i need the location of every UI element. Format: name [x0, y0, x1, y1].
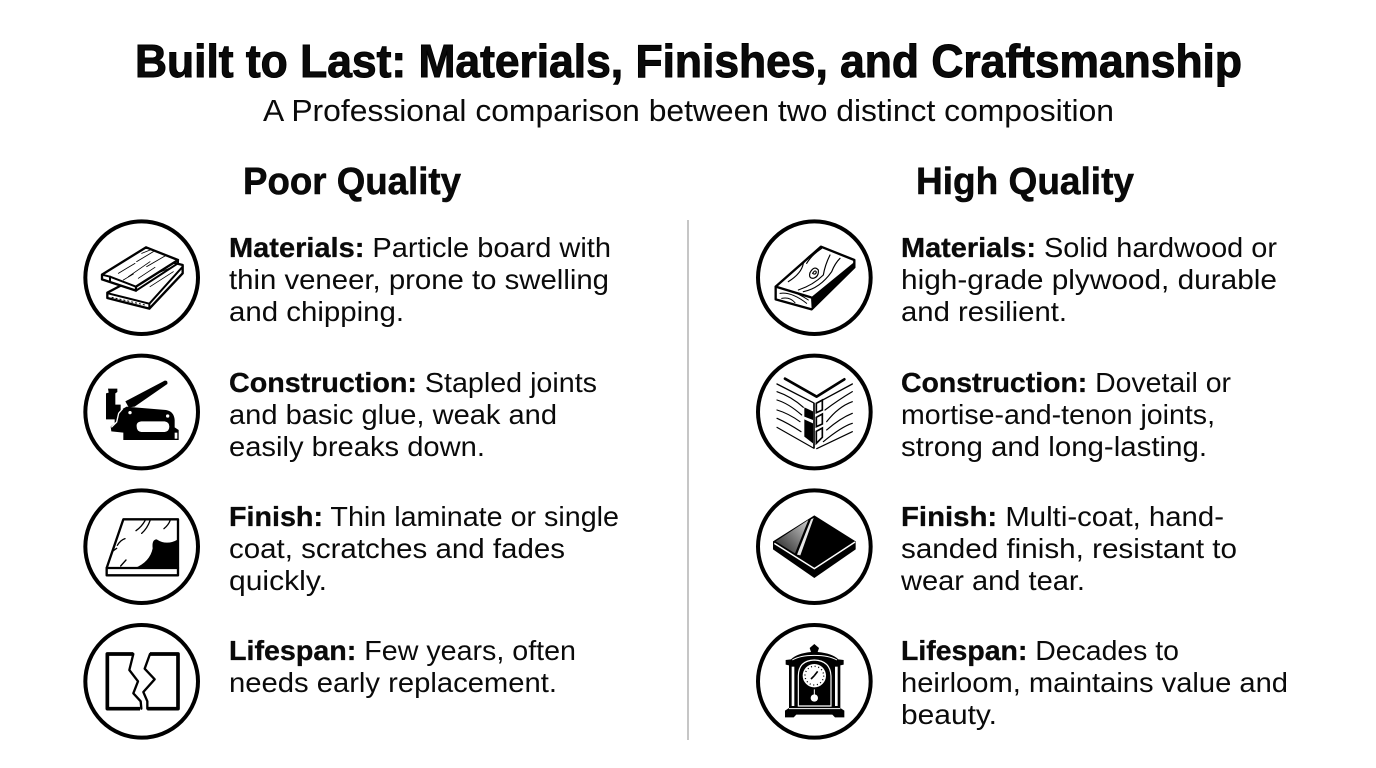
icon: grandfather clock [758, 625, 871, 738]
icon: staple gun [85, 356, 198, 468]
text: materials: high-grade plywood, durable [901, 264, 1277, 295]
text: materials: Materials: Solid hardwood or [901, 232, 1277, 263]
panel: poor quality [85, 221, 619, 738]
text: finish: Finish: Thin laminate or single [229, 501, 619, 532]
text: construction: Construction: Dovetail or [901, 367, 1231, 398]
text: lifespan: Lifespan: Decades to [901, 635, 1179, 666]
panel: high quality [758, 221, 1288, 738]
icon: solid hardwood block [758, 221, 871, 334]
icon: glossy finish block [758, 490, 871, 603]
icon: dovetail joint [758, 356, 871, 468]
text: finish: quickly. [229, 565, 327, 596]
text: construction: and basic glue, weak and [229, 399, 557, 430]
icon: cracked panel [85, 625, 198, 738]
text: finish: wear and tear. [900, 565, 1085, 596]
text: lifespan: heirloom, maintains value and [901, 667, 1288, 698]
subtitle: A Professional comparison between two distinct composition [263, 93, 1114, 128]
text: construction [229, 367, 597, 462]
icon: particle board planks [85, 221, 198, 334]
heading: high quality: High Quality [916, 161, 1134, 203]
text: finish [229, 501, 619, 596]
text: construction: mortise-and-tenon joints, [901, 399, 1215, 430]
text: construction: Construction: Stapled joints [229, 367, 597, 398]
heading: poor quality: Poor Quality [243, 161, 461, 203]
text: lifespan [229, 635, 576, 698]
text: lifespan [901, 635, 1288, 730]
text: lifespan: Lifespan: Few years, often [229, 635, 576, 666]
text: finish [900, 501, 1237, 596]
text: lifespan: beauty. [901, 699, 997, 730]
text: construction [901, 367, 1231, 462]
title: Built to Last: Materials, Finishes, and Craftsmanship [135, 35, 1242, 87]
text: materials: thin veneer, prone to swelling [229, 264, 609, 295]
icon: peeling laminate [85, 490, 198, 603]
text: materials: and chipping. [229, 296, 404, 327]
text: finish: coat, scratches and fades [229, 533, 565, 564]
text: finish: Finish: Multi-coat, hand- [901, 501, 1224, 532]
text: materials: Materials: Particle board with [229, 232, 611, 263]
text: construction: easily breaks down. [229, 431, 485, 462]
text: construction: strong and long-lasting. [901, 431, 1207, 462]
text: materials [901, 232, 1277, 327]
text: lifespan: needs early replacement. [229, 667, 557, 698]
text: materials: and resilient. [901, 296, 1067, 327]
text: materials [229, 232, 611, 327]
text: finish: sanded finish, resistant to [901, 533, 1237, 564]
